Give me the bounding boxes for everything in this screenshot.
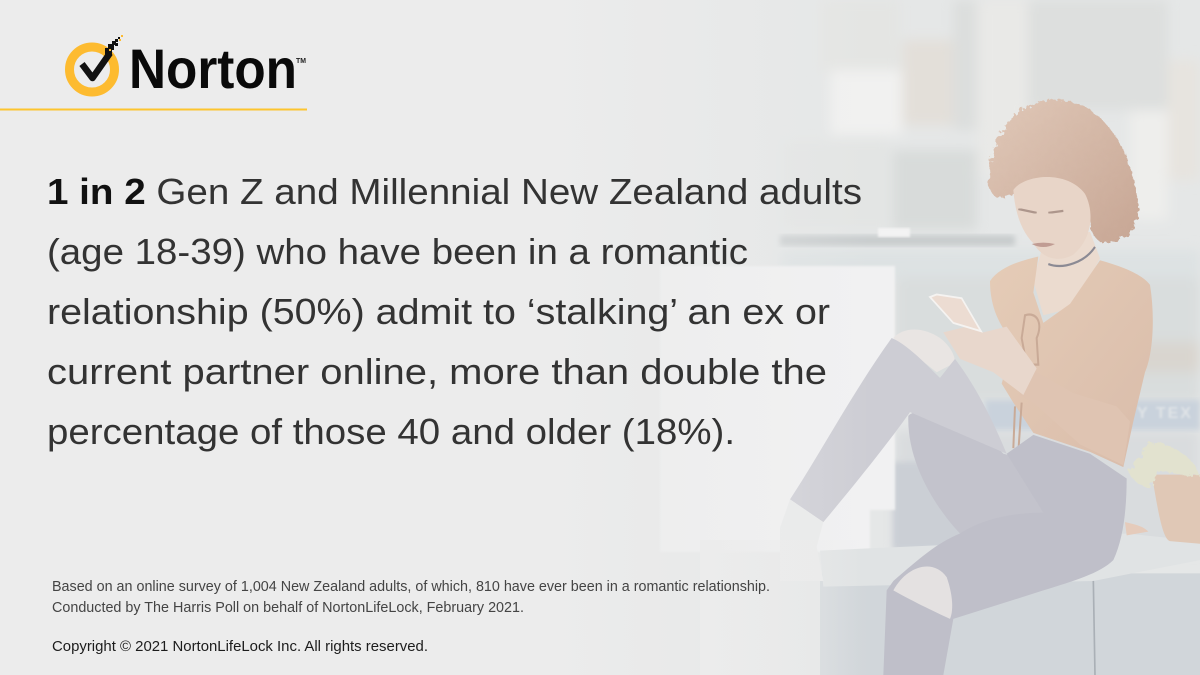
photo fade toward the left [540, 0, 870, 675]
survey footnote [52, 579, 770, 616]
foot [780, 499, 823, 581]
main statement: relationship (50%) admit to ‘stalking’ an ex or [47, 291, 830, 332]
background photo: city skyline: Y TEX [1137, 405, 1193, 422]
photo: woman on ledge with plant [780, 99, 1200, 675]
icon: yellow ring [70, 47, 114, 92]
main statement: 1 in 2 Gen Z and Millennial New Zealand adults [47, 171, 862, 212]
survey footnote: Conducted by The Harris Poll on behalf of NortonLifeLock, February 2021. [52, 600, 524, 616]
neck and chest [1033, 232, 1100, 315]
trademark: TM [296, 56, 306, 65]
plant [1128, 443, 1200, 488]
pale wall block [660, 266, 895, 552]
raised knee skin [893, 330, 955, 372]
main statement: (age 18-39) who have been in a romantic [47, 231, 748, 272]
survey footnote: Based on an online survey of 1,004 New Zealand adults, of which, 810 have ever been in a romantic relationship. [52, 579, 770, 595]
main statement: current partner online, more than double the [47, 351, 827, 392]
pot [1152, 475, 1200, 544]
main statement [47, 171, 862, 452]
hair [988, 99, 1139, 243]
knee tear [893, 567, 952, 619]
phone [930, 294, 981, 331]
near raised leg [790, 338, 1007, 522]
choker [1048, 247, 1095, 266]
face [1013, 177, 1091, 259]
main statement: percentage of those 40 and older (18%). [47, 411, 735, 452]
wordmark: Norton [129, 37, 297, 100]
copyright: Copyright © 2021 NortonLifeLock Inc. All rights reserved. [52, 639, 428, 655]
shirt [990, 256, 1153, 467]
icon: checkmark [82, 53, 110, 78]
hand [943, 327, 1037, 395]
hand on ledge [1125, 522, 1148, 535]
far leg [908, 391, 1047, 534]
background photo: city skyline [560, 0, 1200, 675]
hips and lower leg [883, 435, 1127, 675]
icon: pixel trail [105, 35, 123, 55]
forearm [1013, 342, 1130, 465]
ledge [820, 534, 1200, 675]
logo: Norton [70, 35, 306, 100]
divider under logo [0, 108, 307, 110]
